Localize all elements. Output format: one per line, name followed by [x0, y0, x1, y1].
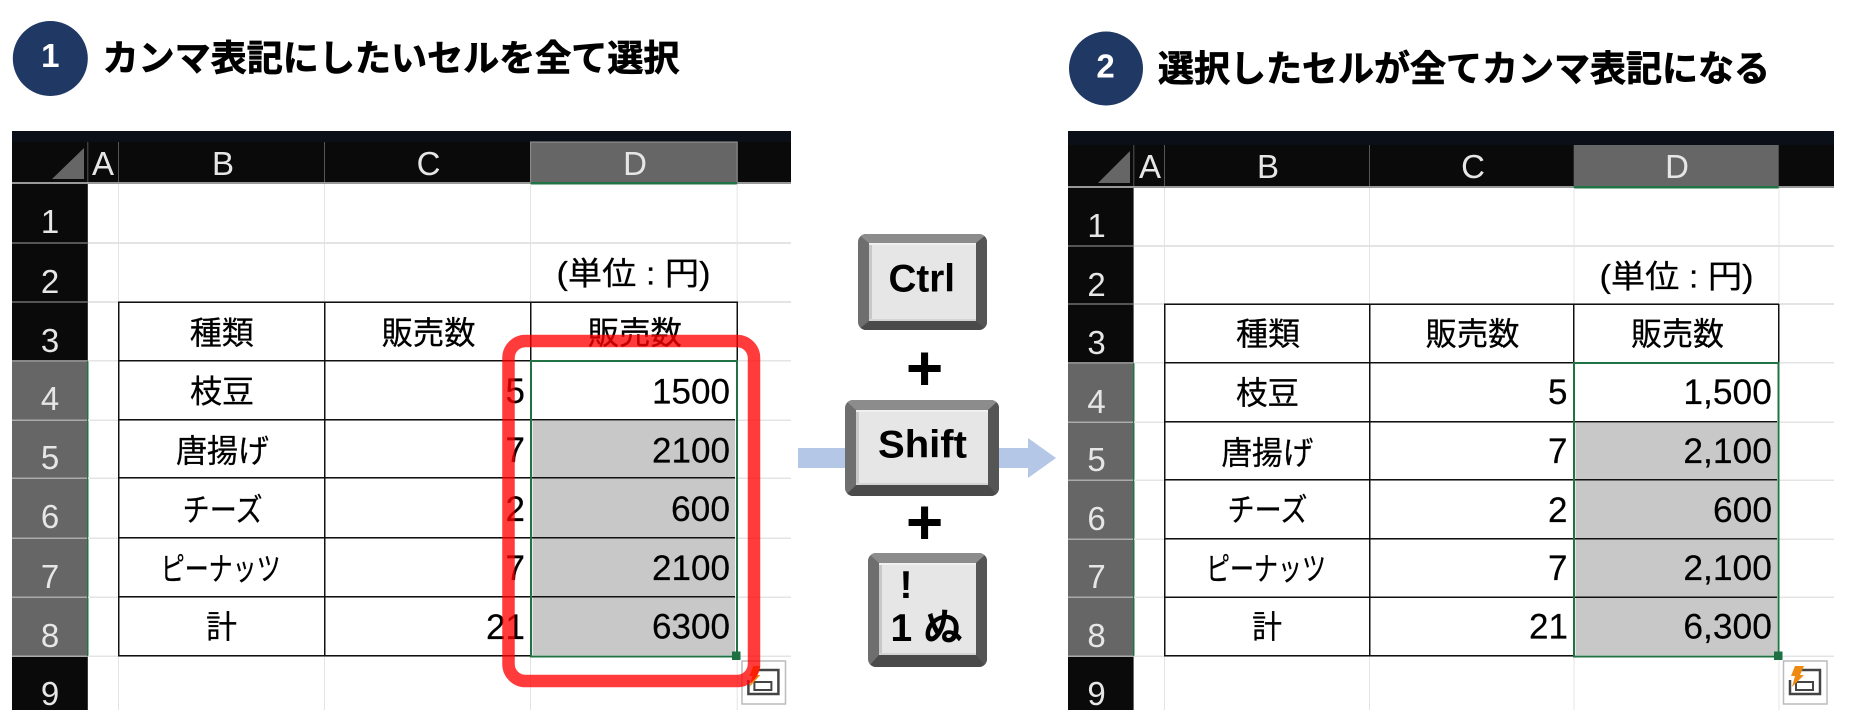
amount values with commas: 1,500 [1683, 373, 1772, 412]
table row labels: 計 [1252, 609, 1282, 645]
row header column: 1 [1087, 207, 1106, 244]
step 2 heading: 選択したセルが全てカンマ表記になる [1158, 40, 1770, 92]
amount values without commas: 600 [671, 490, 730, 529]
panel: spreadsheet before [12, 131, 791, 712]
row header column: 8 [1087, 617, 1106, 654]
table header row: 販売数 [382, 315, 476, 351]
key: Ctrl [858, 234, 987, 330]
row header column [12, 184, 88, 712]
quantity values: 7 [506, 549, 525, 588]
unit label: (単位 : 円) [556, 256, 710, 292]
table row labels: 枝豆 [190, 374, 254, 410]
amount values with commas: 2,100 [1683, 432, 1772, 471]
row header column: 6 [41, 498, 59, 535]
amount values without commas: 1500 [652, 372, 730, 412]
column headers: A [92, 145, 114, 182]
corner triangle [1098, 151, 1130, 183]
selection border [1574, 363, 1782, 660]
panel: spreadsheet after [1068, 131, 1834, 712]
column headers: A [1139, 148, 1161, 185]
key: Ctrl: Ctrl [888, 258, 955, 300]
row header column: 7 [1087, 558, 1106, 595]
key: Shift: Shift [878, 424, 967, 466]
table row labels: 唐揚げ [1221, 435, 1313, 471]
table header row: 販売数 [588, 315, 682, 351]
row header column: 3 [1087, 324, 1106, 361]
quantity values: 7 [1548, 549, 1567, 588]
step 2 number badge [1069, 32, 1143, 106]
amount values without commas [652, 372, 730, 646]
column headers: C [1461, 148, 1485, 185]
quantity values [1529, 373, 1568, 646]
row header column: 2 [41, 263, 59, 300]
row header column: 7 [41, 558, 59, 595]
unit label: (単位 : 円) [1600, 258, 1754, 294]
step 1 number badge [13, 21, 88, 96]
row header column: 1 [41, 203, 59, 240]
data table grid [1164, 304, 1780, 656]
row header column: 4 [1087, 383, 1106, 420]
quantity values: 2 [1548, 491, 1567, 530]
corner triangle [52, 148, 84, 179]
column headers [92, 145, 647, 182]
icon: paste options before [742, 661, 786, 704]
step 1 heading: カンマ表記にしたいセルを全て選択 [102, 30, 680, 82]
table row labels: チーズ [183, 492, 263, 528]
key: 1 ! nu: ぬ [924, 607, 963, 650]
table row labels: 計 [206, 609, 237, 645]
data table grid [118, 302, 738, 656]
table row labels: ピーナッツ [1206, 551, 1326, 587]
column headers [1139, 148, 1689, 185]
quantity values: 7 [1548, 432, 1567, 471]
quantity values: 21 [486, 608, 525, 647]
row header column: 2 [1087, 266, 1106, 303]
key: 1 ! nu: 1 [890, 607, 912, 650]
key: 1 ! nu [868, 553, 987, 667]
plus sign: + [906, 332, 943, 404]
table header row [190, 315, 682, 351]
key: Shift [845, 400, 999, 496]
row header column: 4 [41, 380, 59, 417]
row header column: 3 [41, 322, 59, 359]
table header row: 販売数 [1631, 316, 1724, 352]
row header column: 8 [41, 617, 59, 654]
quantity values: 5 [506, 372, 525, 411]
column headers: B [1257, 148, 1279, 185]
table header row: 種類 [1236, 316, 1300, 352]
quantity values: 5 [1548, 373, 1567, 412]
row header column: 5 [41, 439, 59, 476]
step 2 number badge: 2 [1096, 47, 1115, 84]
row header column [1068, 188, 1134, 712]
amount values without commas: 2100 [652, 432, 730, 470]
row header column: 9 [41, 675, 59, 712]
quantity values: 21 [1529, 608, 1568, 646]
step 1 number badge: 1 [41, 37, 59, 74]
table header row: 種類 [190, 315, 254, 351]
icon: paste options after [1784, 661, 1827, 704]
quantity values: 2 [506, 490, 525, 529]
column headers: B [212, 145, 234, 182]
row header column: 6 [1087, 500, 1106, 537]
amount values with commas: 600 [1713, 491, 1772, 530]
amount values with commas: 2,100 [1683, 549, 1772, 588]
red highlight frame [508, 341, 754, 681]
table row labels: 唐揚げ [176, 433, 269, 469]
table row labels: チーズ [1228, 492, 1308, 528]
column headers: C [417, 145, 441, 182]
table row labels: 枝豆 [1236, 375, 1299, 411]
amount values without commas: 6300 [652, 608, 730, 646]
quantity values: 7 [506, 431, 525, 470]
column headers: D [623, 145, 647, 182]
row header column: 5 [1087, 441, 1106, 478]
key: 1 ! nu: ! [900, 564, 912, 607]
selection border [531, 361, 740, 660]
amount values with commas [1683, 373, 1772, 646]
quantity values [486, 372, 525, 647]
highlighted cells [533, 421, 735, 655]
amount values without commas: 2100 [652, 549, 730, 588]
amount values with commas: 6,300 [1683, 608, 1772, 646]
plus sign: + [906, 486, 943, 558]
row header column: 9 [1087, 675, 1106, 712]
table row labels: ピーナッツ [161, 551, 281, 587]
table row labels [1206, 375, 1326, 645]
table header row: 販売数 [1426, 316, 1520, 352]
table header row [1236, 316, 1724, 352]
column headers: D [1665, 148, 1689, 185]
arrow [798, 438, 1056, 478]
highlighted cells [1576, 423, 1777, 655]
table row labels [161, 374, 281, 645]
